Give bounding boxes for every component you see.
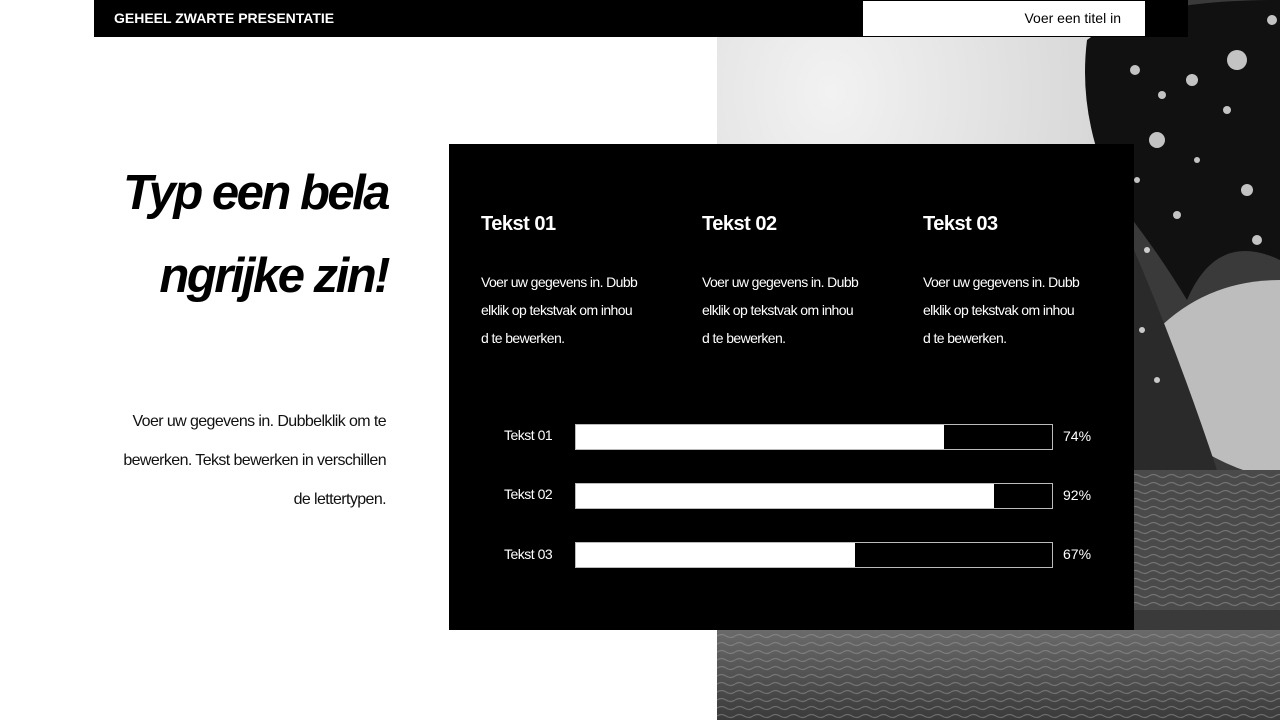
title box xyxy=(863,1,1145,36)
panel: data xyxy=(449,144,1134,630)
headline: ngrijke zin! xyxy=(159,249,388,303)
description: de lettertypen. xyxy=(294,491,386,508)
column 2: Voer uw gegevens in. Dubb xyxy=(702,274,858,290)
bar 1 xyxy=(504,424,1091,450)
description: bewerken. Tekst bewerken in verschillen xyxy=(123,452,386,469)
column 3: d te bewerken. xyxy=(923,330,1006,346)
column 3: Tekst 03 xyxy=(923,213,998,235)
column 1: Tekst 01 xyxy=(481,213,556,235)
bar chart xyxy=(504,424,1091,568)
column 2 xyxy=(702,213,858,346)
bar 2: Tekst 02 xyxy=(504,486,552,502)
bar 3 xyxy=(504,542,1091,568)
photo: water splash xyxy=(717,0,1280,720)
bar 3: 67% xyxy=(1063,546,1091,562)
column 2: Tekst 02 xyxy=(702,213,777,235)
headline xyxy=(123,166,390,303)
bar 1: 74% xyxy=(1063,428,1091,444)
column 2: elklik op tekstvak om inhou xyxy=(702,302,853,318)
bar 3: Tekst 03 xyxy=(504,546,552,562)
description: Voer uw gegevens in. Dubbelklik om te xyxy=(132,413,386,430)
column 3: Voer uw gegevens in. Dubb xyxy=(923,274,1079,290)
bar 2 xyxy=(504,483,1091,509)
bar 1: Tekst 01 xyxy=(504,427,552,443)
title box: Voer een titel in xyxy=(1024,10,1121,26)
column 1: d te bewerken. xyxy=(481,330,564,346)
column 1: Voer uw gegevens in. Dubb xyxy=(481,274,637,290)
bar 2: 92% xyxy=(1063,487,1091,503)
bar title: GEHEEL ZWARTE PRESENTATIE xyxy=(114,10,334,26)
description xyxy=(123,413,386,508)
column 3 xyxy=(923,213,1080,346)
column 2: d te bewerken. xyxy=(702,330,785,346)
column 1: elklik op tekstvak om inhou xyxy=(481,302,632,318)
headline: Typ een bela xyxy=(123,166,388,220)
column 3: elklik op tekstvak om inhou xyxy=(923,302,1074,318)
column 1 xyxy=(481,213,638,346)
top bar xyxy=(94,0,1188,37)
